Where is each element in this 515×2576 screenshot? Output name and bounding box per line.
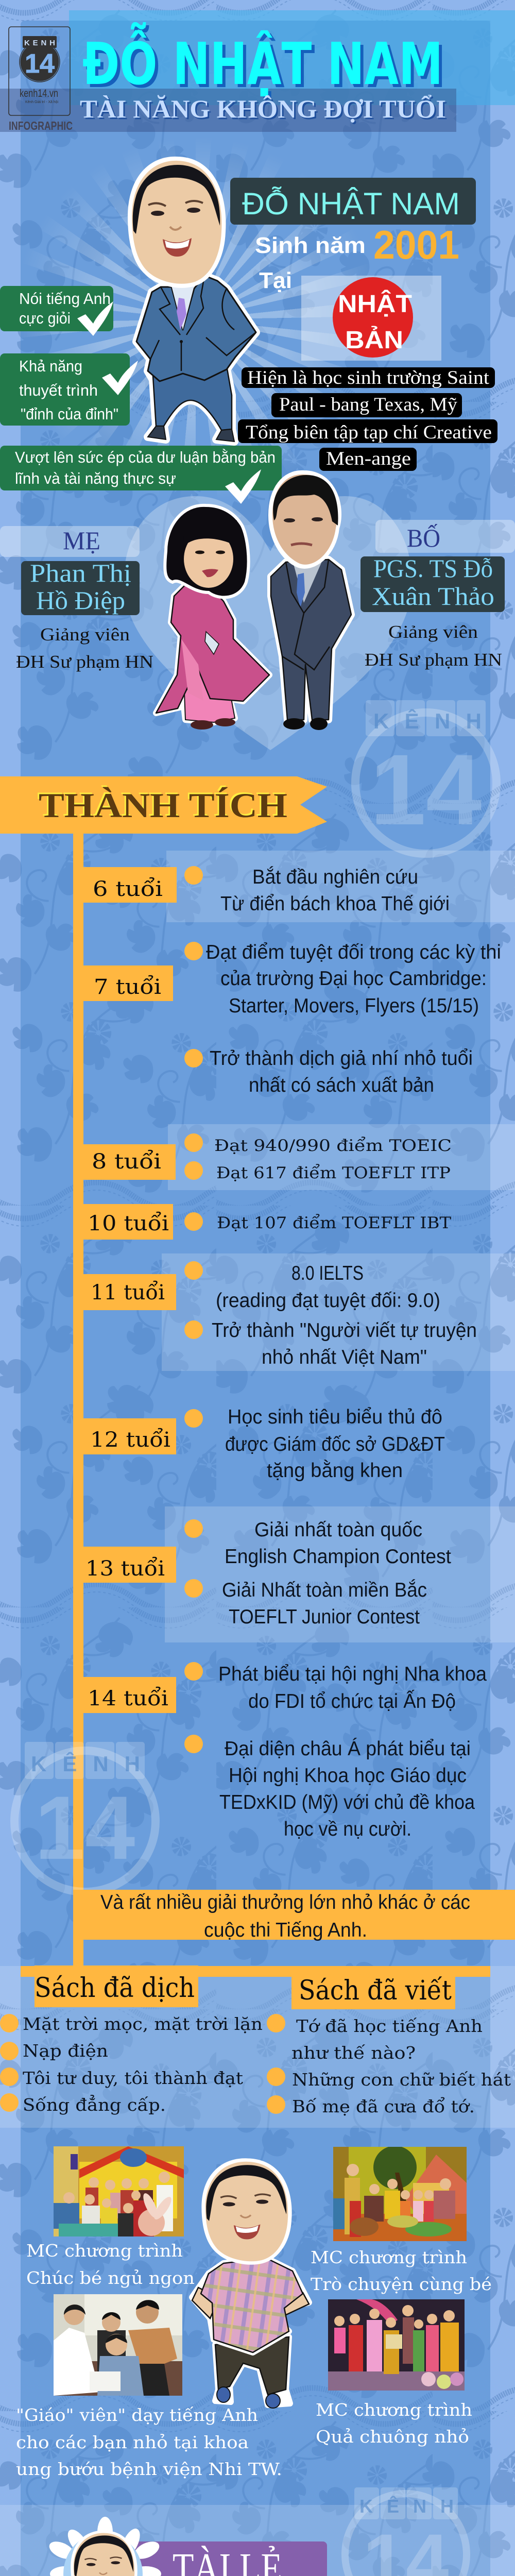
logo: kenh14 infographic: KENH — [24, 39, 55, 47]
bio pills: Men-ange — [326, 448, 411, 469]
age 12: được Giám đốc sở GD&ĐT — [225, 1433, 445, 1455]
heart — [124, 496, 412, 750]
parent: father: Giảng viên — [388, 622, 478, 642]
photo captions: Chúc bé ngủ ngon — [26, 2268, 195, 2288]
green skill boxes: thuyết trình — [19, 381, 98, 399]
bio pills — [238, 367, 497, 471]
watermark logo 2: 14 — [35, 1778, 135, 1878]
age 10 — [83, 1204, 451, 1240]
age 13 — [83, 1519, 451, 1628]
age 6: Bắt đầu nghiên cứu — [252, 866, 418, 888]
age 11: nhỏ nhất Việt Nam" — [262, 1346, 427, 1368]
other awards bar: Và rất nhiều giải thưởng lớn nhỏ khác ở các — [100, 1891, 470, 1913]
watermark logo 2 — [14, 1742, 156, 1892]
photo captions: cho các bạn nhỏ tại khoa — [16, 2432, 249, 2452]
parent: father: PGS. TS Đỗ — [373, 554, 493, 583]
logo: kenh14 infographic: kenh14.vn — [20, 88, 58, 99]
photo captions: MC chương trình — [311, 2247, 467, 2267]
age 7 — [83, 941, 501, 1096]
photo captions: Trò chuyện cùng bé — [311, 2274, 492, 2294]
parent: father: Xuân Thảo — [372, 582, 494, 611]
age 14: TEDxKID (Mỹ) với chủ đề khoa — [219, 1791, 475, 1814]
birthplace: BẢN — [345, 326, 403, 354]
age 12: tặng bằng khen — [267, 1460, 403, 1482]
age 12: 12 tuổi — [90, 1428, 170, 1452]
parent: mother: MẸ — [63, 526, 100, 555]
age 13: TOEFLT Junior Contest — [229, 1606, 420, 1628]
portrait: Nhật Nam in blue suit — [130, 159, 256, 442]
age 14: do FDI tổ chức tại Ấn Độ — [248, 1690, 456, 1713]
watermark logo 1: 14 — [370, 734, 482, 846]
logo: kenh14 infographic: INFOGRAPHIC — [9, 119, 73, 132]
age 7: Trở thành dịch giả nhí nhỏ tuổi — [210, 1047, 473, 1070]
green skill boxes: cực giỏi — [19, 309, 71, 327]
watermark logo 1 — [355, 700, 496, 854]
photo captions: Quả chuông nhỏ — [316, 2427, 469, 2447]
parent: mother: Giảng viên — [40, 624, 130, 645]
birth year: 2001 — [373, 222, 459, 267]
heading: talents — [130, 2541, 327, 2576]
watermark logo 1: KÊNH — [373, 708, 482, 733]
watermark logo 2: KÊNH — [31, 1751, 140, 1776]
age 7: của trường Đại học Cambridge: — [220, 968, 487, 990]
written books: như thế nào? — [291, 2043, 416, 2063]
age 7: 7 tuổi — [94, 975, 161, 999]
age 14: Hội nghị Khoa học Giáo dục — [229, 1765, 467, 1787]
written books: Những con chữ biết hát — [292, 2070, 511, 2090]
flower portrait — [47, 2517, 162, 2576]
bio pills: Tổng biên tập tạp chí Creative — [246, 422, 492, 443]
age 6: Từ điển bách khoa Thế giới — [220, 893, 450, 915]
birthplace: NHẬT — [338, 290, 412, 318]
translated books: Sách đã dịch — [35, 1973, 195, 2004]
name box — [230, 178, 476, 225]
photo captions: MC chương trình — [316, 2400, 472, 2420]
age 13: Giải Nhất toàn miền Bắc — [222, 1579, 427, 1601]
bio pills: Paul - bang Texas, Mỹ — [279, 394, 458, 415]
age 13: English Champion Contest — [225, 1546, 451, 1568]
header band — [0, 10, 515, 132]
age 12: Học sinh tiêu biểu thủ đô — [228, 1406, 442, 1428]
translated books: Nạp điện — [23, 2041, 108, 2061]
age 6 — [83, 866, 450, 915]
sunburst rays behind first portrait — [30, 155, 355, 462]
parent: father — [360, 520, 515, 670]
age 14: 14 tuổi — [88, 1687, 168, 1710]
green skill boxes: "đỉnh của đỉnh" — [21, 405, 118, 423]
photo captions: MC chương trình — [26, 2241, 183, 2261]
bio pills: Hiện là học sinh trường Saint — [247, 367, 490, 388]
age 12 — [83, 1406, 445, 1482]
written books: Bố mẹ đã cưa đổ tớ. — [292, 2096, 475, 2116]
banner: achievements — [0, 776, 327, 834]
figure: father in dark suit — [270, 472, 351, 730]
photo captions: "Giáo" viên" dạy tiếng Anh — [16, 2405, 258, 2425]
name box: ĐỖ NHẬT NAM — [242, 187, 460, 221]
age 8: 8 tuổi — [92, 1150, 161, 1174]
age 14: Phát biểu tại hội nghị Nha khoa — [218, 1663, 487, 1685]
age 7: Đạt điểm tuyệt đối trong các kỳ thi — [206, 941, 501, 963]
parent: father: BỐ — [407, 523, 440, 552]
age 14: học về nụ cười. — [284, 1818, 411, 1840]
birth year — [255, 222, 459, 267]
age 13: Giải nhất toàn quốc — [254, 1519, 422, 1541]
age 11: 11 tuổi — [91, 1281, 165, 1304]
green skill boxes — [0, 286, 282, 504]
photo: Quả chuông nhỏ stage — [328, 2299, 465, 2391]
age 13: 13 tuổi — [85, 1557, 165, 1581]
parent: mother — [0, 526, 153, 672]
watermark logo 3: KÊNH — [359, 2495, 454, 2517]
written books: Tớ đã học tiếng Anh — [296, 2016, 483, 2036]
translated books: Tôi tư duy, tôi thành đạt — [23, 2068, 243, 2088]
logo: kenh14 infographic: Kênh Giải trí - Xã hội — [25, 100, 58, 104]
green skill boxes: Vượt lên sức ép của dư luận bằng bản — [15, 448, 276, 466]
timeline spine — [73, 834, 83, 1967]
photo: Chúc bé ngủ ngon set — [54, 2146, 184, 2236]
green skill boxes: Nói tiếng Anh — [19, 290, 111, 308]
photo captions — [16, 2241, 492, 2479]
other awards bar: cuộc thi Tiếng Anh. — [204, 1919, 367, 1941]
parent: father: ĐH Sư phạm HN — [365, 650, 502, 670]
green skill boxes: lĩnh và tài năng thực sự — [15, 469, 176, 487]
age 10: 10 tuổi — [88, 1212, 169, 1235]
birthplace — [259, 268, 441, 361]
translated books: Sống đẳng cấp. — [23, 2094, 166, 2115]
written books: Sách đã viết — [299, 1975, 452, 2006]
photo: Trò chuyện cùng bé set — [333, 2147, 467, 2241]
figure: boy in plaid shirt — [192, 2160, 309, 2408]
logo: kenh14 infographic — [9, 27, 73, 132]
figure: mother in ao dai — [156, 505, 269, 730]
age 8: Đạt 617 điểm TOEFLT ITP — [216, 1163, 451, 1182]
age 7: Starter, Movers, Flyers (15/15) — [229, 995, 479, 1017]
age 7: nhất có sách xuất bản — [249, 1074, 434, 1096]
age 8 — [83, 1133, 452, 1182]
age 11: Trở thành "Người viết tự truyện — [212, 1319, 477, 1342]
other awards bar — [73, 1890, 515, 1941]
photo captions: ung bướu bệnh viện Nhi TW. — [16, 2459, 282, 2479]
parent: mother: Phan Thị — [30, 558, 131, 587]
green skill boxes: Khả năng — [19, 357, 82, 375]
written books — [267, 1975, 511, 2116]
age 14: Đại diện châu Á phát biểu tại — [225, 1738, 471, 1760]
photo: teaching at children's hospital — [54, 2294, 182, 2396]
age 8: Đạt 940/990 điểm TOEIC — [214, 1136, 452, 1155]
parent: mother: Hồ Điệp — [36, 586, 125, 615]
age 11 — [83, 1261, 477, 1368]
birth year: Sinh năm — [255, 233, 366, 258]
parent: mother: ĐH Sư phạm HN — [16, 652, 153, 672]
translated books — [0, 1965, 263, 2115]
subtitle: TÀI NĂNG KHÔNG ĐỢI TUỔI — [80, 94, 446, 123]
translated books: Mặt trời mọc, mặt trời lặn — [23, 2014, 263, 2034]
age 11: 8.0 IELTS — [291, 1262, 364, 1284]
age 11: (reading đạt tuyệt đối: 9.0) — [216, 1290, 440, 1312]
logo: kenh14 infographic: 14 — [25, 49, 55, 79]
age 10: Đạt 107 điểm TOEFLT IBT — [217, 1213, 451, 1232]
banner: achievements: THÀNH TÍCH — [39, 786, 287, 825]
age 14 — [83, 1662, 487, 1840]
birthplace: Tại — [259, 268, 292, 293]
age 6: 6 tuổi — [93, 877, 163, 901]
watermark logo 3 — [345, 2487, 467, 2576]
books connector — [21, 1966, 490, 1977]
